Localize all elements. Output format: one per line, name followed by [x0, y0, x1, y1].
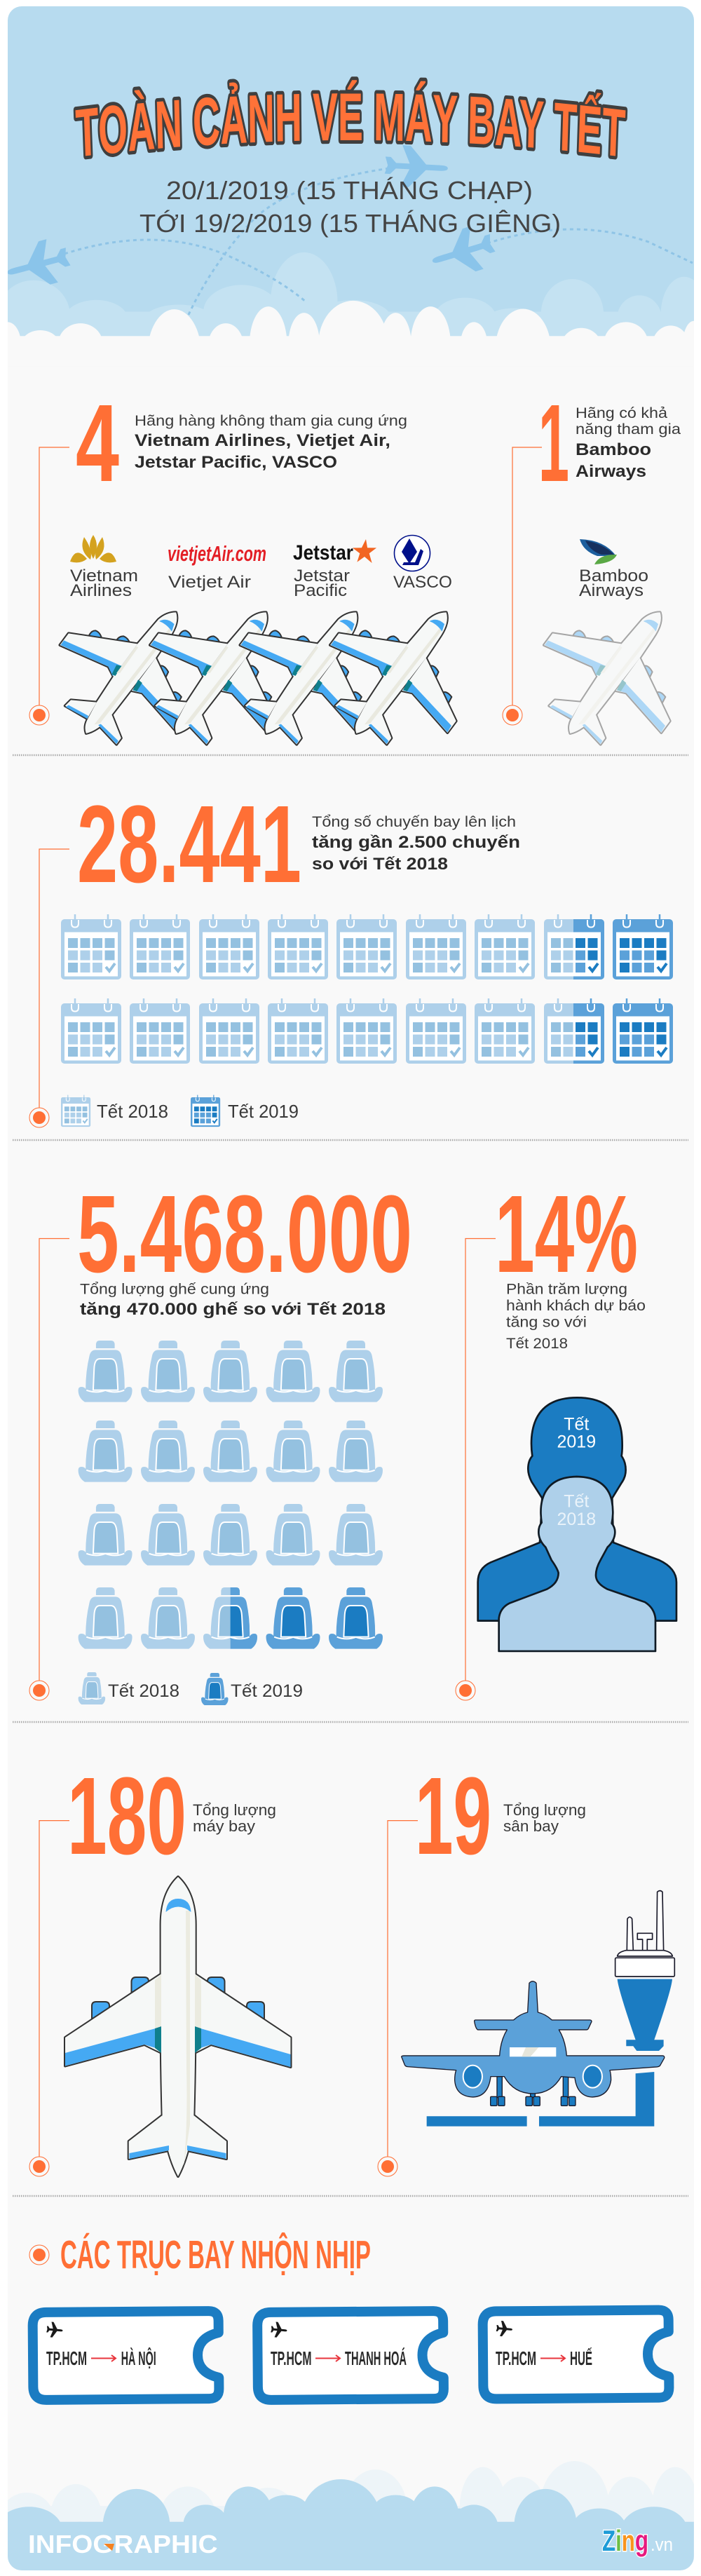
logo: Vietnam Airlines: [70, 535, 116, 562]
label: Jetstar Pacific: [294, 567, 350, 600]
icon: passenger silhouettes: Tết: [564, 1414, 589, 1434]
panel: footer clouds: [0, 2461, 698, 2576]
connector left: [29, 1821, 69, 2176]
front clouds: [8, 300, 694, 357]
icon: plane left: [8, 239, 70, 285]
text: flights: so với Tết 2018: [312, 855, 448, 874]
connector right: [456, 1238, 496, 1700]
text: aircraft: [193, 1801, 276, 1835]
ticket: Thanh Hoa: THANH HOÁ: [345, 2347, 407, 2369]
ticket: Thanh Hoa: TP.HCM: [271, 2347, 311, 2369]
back clouds: [8, 252, 694, 336]
heading: CÁC TRỤC BAY NHỘN NHỊP: [60, 2232, 371, 2277]
text: four airlines: [135, 413, 407, 472]
legend: seats: Tết 2019: [231, 1681, 303, 1701]
text: aircraft: Tổng lượng: [193, 1801, 276, 1819]
text: airports: Tổng lượng: [503, 1801, 586, 1819]
panel: flights: [29, 783, 673, 1127]
logo: VASCO: [394, 536, 430, 571]
number 28.441: 28.441: [77, 783, 301, 906]
text: four airlines: Vietnam Airlines, Vietjet Air,: [135, 431, 390, 450]
text: four airlines: Jetstar Pacific, VASCO: [135, 453, 337, 472]
icon: passenger silhouettes: [478, 1397, 676, 1651]
label: Vietnam Airlines: Vietnam: [70, 567, 138, 585]
icon: top-view airplane: [65, 1877, 290, 2176]
icon: passenger silhouettes: Tết: [564, 1491, 589, 1511]
icon: passenger silhouettes: 2019: [557, 1432, 596, 1451]
text: flights: [312, 814, 520, 874]
runway: [427, 2072, 654, 2127]
label: Vietnam Airlines: Airlines: [70, 581, 132, 600]
text: airports: sân bay: [503, 1817, 559, 1835]
text: passengers: tăng so với: [506, 1315, 587, 1331]
text: seats: Tổng lượng ghế cung ứng: [80, 1282, 269, 1297]
ticket: Hue: TP.HCM: [496, 2347, 536, 2369]
logo: INFOGRAPHIC: INFOGRAPHIC: [28, 2530, 218, 2558]
panel: airlines: [29, 382, 681, 745]
bullet: [29, 2245, 49, 2265]
text: four airlines: Hãng hàng không tham gia cung ứng: [135, 413, 407, 429]
connector left: [29, 1238, 69, 1700]
flight paths: [64, 168, 693, 316]
text: one airline: Hãng có khả: [576, 405, 667, 421]
icon: plane right: [432, 227, 495, 271]
control tower: [615, 1891, 674, 2051]
icon: passenger silhouettes: 2018: [557, 1510, 596, 1529]
label: Vietjet Air: Vietjet Air: [168, 573, 251, 592]
label: Vietnam Airlines: [70, 567, 138, 600]
panel: fleet and airports: [29, 1755, 674, 2176]
number 180: 180: [67, 1755, 186, 1878]
legend: calendars: Tết 2018: [97, 1101, 168, 1122]
number 1: 1: [538, 382, 569, 505]
text: seats: tăng 470.000 ghế so với Tết 2018: [80, 1300, 386, 1319]
text: passengers: Phần trăm lượng: [506, 1282, 627, 1297]
legend: seats: Tết 2018: [108, 1681, 179, 1701]
text: passengers: hành khách dự báo: [506, 1298, 646, 1314]
text: one airline: Bamboo: [576, 440, 651, 459]
label: Jetstar Pacific: Jetstar: [294, 567, 350, 585]
text: passengers: Tết 2018: [506, 1336, 568, 1352]
text: aircraft: máy bay: [193, 1817, 255, 1835]
calendars row 1: [61, 914, 673, 979]
subtitle: 20/1/2019 (15 THÁNG CHẠP): [166, 176, 533, 205]
landing gear: [491, 2077, 576, 2106]
text: flights: Tổng số chuyến bay lên lịch: [312, 814, 516, 830]
text: one airline: Airways: [576, 462, 646, 481]
logo: Jetstar: Jetstar: [293, 541, 353, 564]
panel: header sky: [8, 6, 694, 337]
legend: calendars: [61, 1095, 299, 1127]
legend: calendars: Tết 2019: [228, 1101, 299, 1122]
text: airports: [503, 1801, 586, 1835]
panel: seats and passengers: [29, 1173, 676, 1705]
icon: plane center: [384, 144, 449, 189]
icon: faded Bamboo plane: [544, 612, 670, 745]
subtitle: [139, 176, 561, 238]
icon: four planes: [60, 612, 456, 745]
connector right: [503, 447, 542, 725]
text: one airline: [576, 405, 681, 481]
text: passengers: [506, 1282, 646, 1352]
title: TOÀN CẢNH VÉ MÁY BAY TẾT: [73, 76, 628, 160]
calendars row 2: [61, 998, 673, 1064]
number 19: 19: [415, 1755, 491, 1878]
subtitle: TỚI 19/2/2019 (15 THÁNG GIÊNG): [139, 209, 561, 238]
ticket: Hue: HUẾ: [570, 2347, 592, 2369]
seat grid: [79, 1341, 383, 1649]
label: Jetstar Pacific: Pacific: [294, 581, 347, 600]
legend: seats: [79, 1672, 303, 1705]
ticket: Ha Noi: TP.HCM: [46, 2347, 87, 2369]
logo: Zing.vn: .vn: [651, 2534, 673, 2555]
ticket: Hue: [483, 2310, 669, 2399]
ticket: Thanh Hoa: [257, 2311, 444, 2400]
number 5.468.000: 5.468.000: [77, 1173, 412, 1296]
label: Bamboo Airways: Bamboo: [579, 567, 648, 585]
front plane: [402, 1981, 665, 2097]
text: seats: [80, 1282, 386, 1319]
label: Bamboo Airways: Airways: [579, 581, 644, 600]
connector left: [29, 447, 69, 725]
number 4: 4: [76, 382, 119, 505]
ticket: Ha Noi: HÀ NỘI: [121, 2347, 156, 2369]
text: flights: tăng gần 2.500 chuyến: [312, 833, 520, 852]
connector: [29, 849, 69, 1127]
panel: busy routes: [29, 2232, 669, 2400]
logo: Bamboo: [580, 539, 617, 564]
ticket: Ha Noi: [33, 2311, 219, 2400]
connector right: [378, 1821, 418, 2176]
logo: Zing.vn: Zing: [602, 2524, 648, 2557]
icon: airport: [402, 1891, 674, 2127]
label: Bamboo Airways: [579, 567, 648, 600]
text: one airline: năng tham gia: [576, 421, 681, 438]
logo: Vietjet: vietjetAir.com: [168, 541, 266, 566]
label: VASCO: VASCO: [393, 573, 452, 592]
